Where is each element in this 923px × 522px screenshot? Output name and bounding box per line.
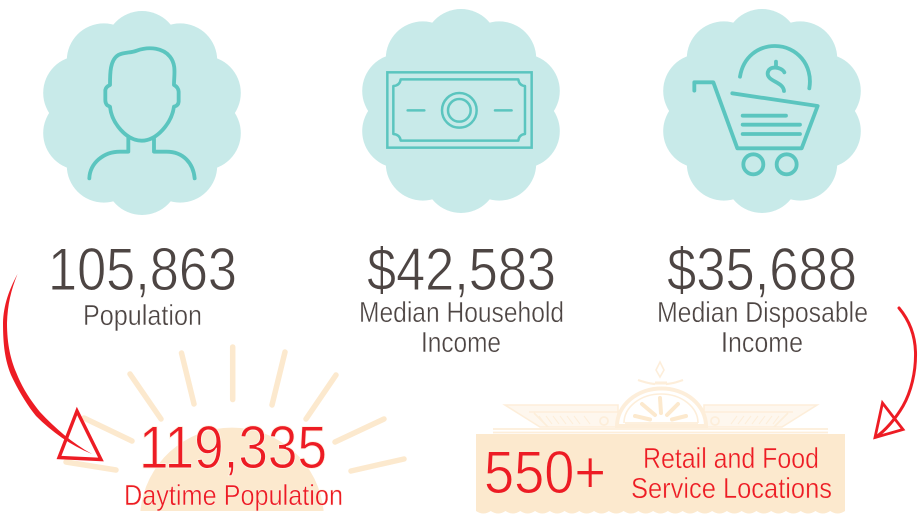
label: retail and food service locations: Service Locations — [631, 473, 832, 505]
label: population: Population — [83, 300, 202, 332]
icon: person in scalloped badge — [43, 11, 241, 215]
label: median household income: Income — [421, 327, 501, 359]
arrow: disposable income to retail locations — [875, 308, 916, 438]
number: median disposable income: $35,688 — [667, 236, 857, 303]
icon: shopping cart in scalloped badge — [663, 9, 861, 213]
number: retail and food locations: 550+ — [484, 439, 606, 506]
panel: median disposable income — [657, 9, 868, 359]
illustration: marquee ornament — [493, 362, 828, 432]
number: median household income: $42,583 — [367, 236, 556, 303]
marquee sign panel — [476, 434, 845, 514]
panel: median household income — [359, 9, 564, 359]
panel: retail and food service locations — [476, 362, 845, 514]
number: population: 105,863 — [48, 236, 237, 303]
panel: daytime population — [66, 347, 404, 512]
label: median household income: Median Household — [359, 297, 564, 329]
label: median disposable income: Income — [721, 327, 803, 359]
icon: banknote in scalloped badge — [362, 9, 560, 213]
label: median disposable income: Median Disposable — [657, 297, 868, 329]
number: daytime population: 119,335 — [139, 414, 327, 481]
arrow: population to daytime population — [3, 274, 101, 460]
icon: rising sun with rays — [66, 347, 404, 511]
label: daytime population: Daytime Population — [124, 480, 343, 512]
panel: population — [43, 11, 241, 332]
label: retail and food service locations: Retail and Food — [643, 443, 819, 475]
